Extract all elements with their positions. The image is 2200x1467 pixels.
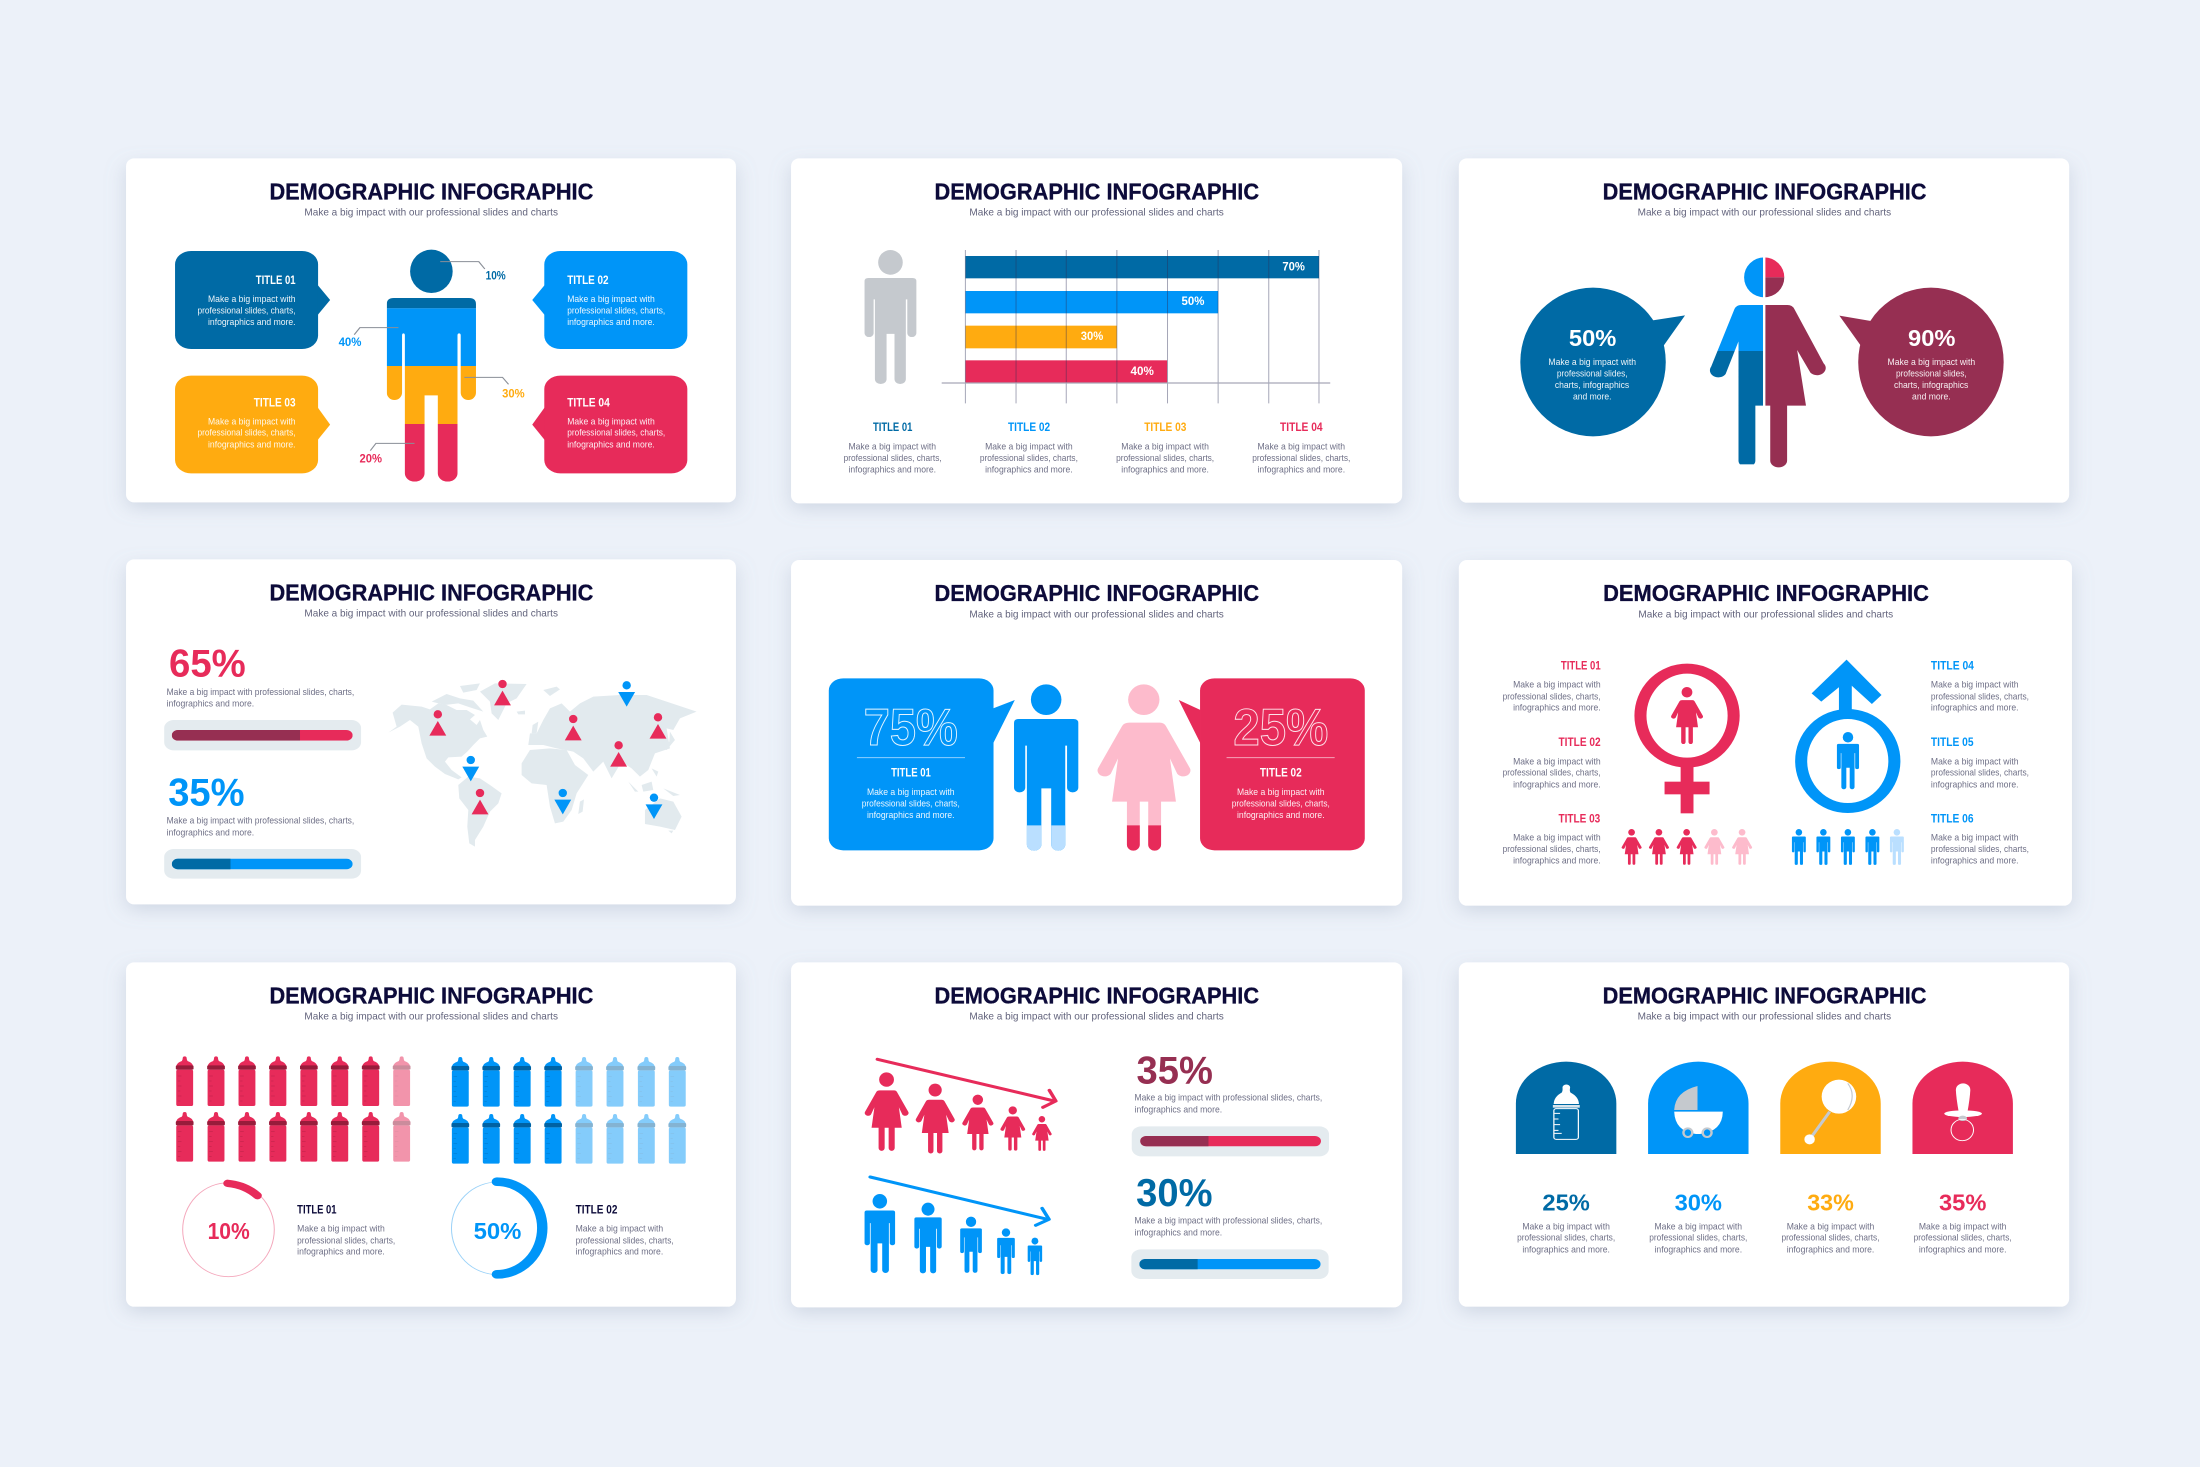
card xyxy=(126,158,736,502)
text block: title 02: professional slides, charts, xyxy=(576,1236,674,1246)
ring chart: 50% xyxy=(451,1182,544,1275)
panel: male and female percentages xyxy=(791,560,1402,906)
callout: title 02: Make a big impact with xyxy=(567,295,655,305)
ring chart: 10%: 10% xyxy=(208,1219,250,1244)
text block: title 06: Make a big impact with xyxy=(1931,833,2019,843)
callout: 75%: professional slides, charts, xyxy=(862,799,960,809)
text block: title 05 xyxy=(1931,735,2029,790)
statistic: 35%: 35% xyxy=(1939,1190,1986,1216)
callout: title 04 xyxy=(532,376,687,473)
text block: title 03: infographics and more. xyxy=(1121,465,1209,475)
statistic: 25% xyxy=(1517,1190,1615,1255)
text block: title 02: infographics and more. xyxy=(985,465,1073,475)
text block: title 03: infographics and more. xyxy=(1513,856,1601,866)
statistic: 25%: Make a big impact with xyxy=(1522,1222,1610,1232)
subheading: Make a big impact with our professional slides and charts xyxy=(304,1011,558,1022)
text block: title 02: TITLE 02 xyxy=(1008,420,1050,434)
text block: title 02: Make a big impact with xyxy=(576,1224,663,1234)
statistic: 25%: 25% xyxy=(1542,1190,1590,1216)
panel: baby bottle pictograms xyxy=(126,962,736,1307)
statistic: 35%: Make a big impact with professional slides, charts, xyxy=(167,816,354,826)
card xyxy=(791,962,1402,1307)
callout: title 04: professional slides, charts, xyxy=(567,428,665,438)
text block: title 01: infographics and more. xyxy=(848,465,936,475)
arch icon: baby rattle xyxy=(1780,1062,1881,1154)
text block: title 04: infographics and more. xyxy=(1258,465,1345,475)
text block: title 02: TITLE 02 xyxy=(576,1203,617,1216)
speech bubble: 50% xyxy=(1520,288,1685,436)
statistic: 35% xyxy=(1914,1190,2012,1255)
card xyxy=(1459,158,2069,503)
text block: title 01: TITLE 01 xyxy=(873,420,912,434)
text block: title 02: TITLE 02 xyxy=(1558,735,1601,749)
callout: title 03: infographics and more. xyxy=(208,440,296,450)
callout: 25% xyxy=(1179,678,1365,850)
progress bar: 30% xyxy=(1131,1249,1329,1279)
callout: 25%: TITLE 02 xyxy=(1260,766,1302,779)
text block: title 01 xyxy=(844,420,942,475)
heading: DEMOGRAPHIC INFOGRAPHIC xyxy=(269,580,593,606)
subheading: Make a big impact with our professional slides and charts xyxy=(969,208,1224,218)
text block: title 03: TITLE 03 xyxy=(1558,812,1600,825)
ring chart: 50%: 50% xyxy=(474,1219,521,1244)
speech bubble: 90% xyxy=(1839,288,2004,436)
statistic: 25%: infographics and more. xyxy=(1522,1245,1610,1255)
speech bubble: 50%: charts, infographics xyxy=(1555,381,1629,391)
callout: 25%: Make a big impact with xyxy=(1237,788,1325,798)
callout: title 02: TITLE 02 xyxy=(567,273,609,287)
speech bubble: 90%: charts, infographics xyxy=(1894,381,1968,391)
text block: title 02: infographics and more. xyxy=(1513,780,1601,790)
text block: title 01: infographics and more. xyxy=(1513,703,1601,713)
text block: title 06: TITLE 06 xyxy=(1931,812,1974,825)
callout: title 02: infographics and more. xyxy=(567,318,655,328)
text block: title 04: Make a big impact with xyxy=(1931,680,2019,690)
bar chart: 70% xyxy=(1282,259,1305,273)
speech bubble: 50%: Make a big impact with xyxy=(1548,358,1636,368)
panel: world map statistics xyxy=(126,559,736,904)
statistic: 35%: professional slides, charts, xyxy=(1914,1233,2012,1243)
text block: title 03: professional slides, charts, xyxy=(1116,454,1214,464)
panel: horizontal bar chart xyxy=(791,158,1402,503)
statistic: 30%: 30% xyxy=(1675,1190,1722,1216)
callout: title 03 xyxy=(175,376,330,473)
text block: title 01: Make a big impact with xyxy=(297,1224,385,1234)
icon: grey person xyxy=(865,250,916,384)
world map xyxy=(388,683,697,847)
callout: title 03: Make a big impact with xyxy=(208,417,296,427)
text block: title 03: TITLE 03 xyxy=(1144,420,1186,434)
statistic: 35%: infographics and more. xyxy=(1919,1245,2006,1255)
bar chart: 30% xyxy=(1081,329,1104,343)
statistic: 30% xyxy=(1649,1190,1747,1255)
text block: title 03: professional slides, charts, xyxy=(1503,845,1601,855)
subheading: Make a big impact with our professional slides and charts xyxy=(304,608,558,619)
speech bubble: 90%: and more. xyxy=(1912,392,1951,402)
subheading: Make a big impact with our professional slides and charts xyxy=(969,1011,1224,1022)
statistic: 30%: infographics and more. xyxy=(1655,1245,1742,1255)
label: 10%: 10% xyxy=(486,269,506,282)
pictogram: red bottles xyxy=(176,1056,410,1162)
statistic: 25%: professional slides, charts, xyxy=(1517,1233,1615,1243)
arch icon: baby bottle xyxy=(1516,1062,1616,1154)
statistic: 65% xyxy=(167,642,354,709)
pictogram: blue bottles xyxy=(451,1057,686,1164)
text block: title 01 xyxy=(1503,659,1601,713)
arch icon: pacifier xyxy=(1912,1062,2013,1154)
statistic: 30%: Make a big impact with xyxy=(1655,1222,1742,1232)
callout: title 03: professional slides, charts, xyxy=(198,428,296,438)
callout: 75%: 75% xyxy=(864,699,958,757)
label: 30% xyxy=(464,377,525,400)
text block: title 01: TITLE 01 xyxy=(1561,659,1601,672)
speech bubble: 90%: Make a big impact with xyxy=(1888,358,1975,368)
text block: title 04: TITLE 04 xyxy=(1931,659,1975,672)
statistic: 33%: infographics and more. xyxy=(1787,1245,1874,1255)
text block: title 02: professional slides, charts, xyxy=(1503,768,1601,778)
panel: gender symbols xyxy=(1459,560,2072,906)
subheading: Make a big impact with our professional slides and charts xyxy=(304,207,558,218)
statistic: 35%: infographics and more. xyxy=(167,828,254,838)
statistic: 65%: Make a big impact with professional slides, charts, xyxy=(167,688,354,698)
text block: title 01: Make a big impact with xyxy=(1513,680,1601,690)
heading: DEMOGRAPHIC INFOGRAPHIC xyxy=(1603,179,1927,205)
label: 20% xyxy=(359,443,415,465)
text block: title 03: Make a big impact with xyxy=(1121,442,1209,452)
icon: male symbol xyxy=(1801,660,1894,808)
text block: title 03: Make a big impact with xyxy=(1513,833,1601,843)
card xyxy=(1459,560,2072,906)
callout: title 04: Make a big impact with xyxy=(567,417,655,427)
speech bubble: 90%: 90% xyxy=(1908,326,1955,351)
bar chart: 40% xyxy=(1131,364,1154,378)
text block: title 05: professional slides, charts, xyxy=(1931,768,2029,778)
speech bubble: 90%: professional slides, xyxy=(1896,369,1967,379)
text block: title 03 xyxy=(1116,420,1214,475)
text block: title 02 xyxy=(1503,735,1601,790)
bar chart xyxy=(942,250,1330,403)
panel: body segments chart xyxy=(126,158,736,502)
statistic: 30%: professional slides, charts, xyxy=(1649,1233,1747,1243)
card xyxy=(126,962,736,1307)
callout: 25%: professional slides, charts, xyxy=(1232,799,1330,809)
heading: DEMOGRAPHIC INFOGRAPHIC xyxy=(1603,983,1927,1009)
card xyxy=(791,560,1402,906)
statistic: 30%: Make a big impact with professional slides, charts, xyxy=(1135,1216,1322,1226)
subheading: Make a big impact with our professional slides and charts xyxy=(1638,1011,1892,1022)
arrow: red trend xyxy=(877,1059,1056,1107)
subheading: Make a big impact with our professional slides and charts xyxy=(969,609,1224,620)
speech bubble: 50%: and more. xyxy=(1573,392,1612,402)
text block: title 04: TITLE 04 xyxy=(1280,420,1323,434)
progress bar: 35% xyxy=(1132,1126,1329,1156)
text block: title 02: professional slides, charts, xyxy=(980,454,1078,464)
statistic: 65%: 65% xyxy=(169,642,246,685)
split person figure xyxy=(1707,257,1826,467)
callout: title 01 xyxy=(175,251,330,349)
text block: title 03 xyxy=(1503,812,1601,866)
text block: title 01: infographics and more. xyxy=(297,1247,385,1257)
heading: DEMOGRAPHIC INFOGRAPHIC xyxy=(934,983,1259,1009)
label: 30%: 30% xyxy=(502,386,525,400)
subheading: Make a big impact with our professional slides and charts xyxy=(1638,609,1894,620)
heading: DEMOGRAPHIC INFOGRAPHIC xyxy=(934,581,1259,606)
person figure in colour bands xyxy=(386,250,476,482)
statistic: 30% xyxy=(1135,1172,1322,1238)
heading: DEMOGRAPHIC INFOGRAPHIC xyxy=(269,179,593,205)
text block: title 06: professional slides, charts, xyxy=(1931,845,2029,855)
statistic: 35% xyxy=(167,771,354,838)
text block: title 01: Make a big impact with xyxy=(848,442,936,452)
text block: title 02: infographics and more. xyxy=(576,1247,663,1257)
label: 20%: 20% xyxy=(359,451,382,465)
text block: title 04 xyxy=(1931,659,2029,713)
callout: 25%: 25% xyxy=(1233,699,1328,757)
heading: DEMOGRAPHIC INFOGRAPHIC xyxy=(934,179,1259,205)
female location markers xyxy=(429,680,666,814)
text block: title 05: Make a big impact with xyxy=(1931,757,2019,767)
text block: title 01: TITLE 01 xyxy=(297,1203,337,1216)
card xyxy=(126,559,736,904)
callout: title 03: TITLE 03 xyxy=(254,395,296,409)
text block: title 01 xyxy=(297,1203,395,1257)
speech bubble: 50%: professional slides, xyxy=(1557,369,1628,379)
statistic: 35%: Make a big impact with professional slides, charts, xyxy=(1135,1093,1322,1103)
statistic: 33% xyxy=(1781,1190,1880,1255)
ring chart: 10% xyxy=(183,1183,274,1277)
icon: pink woman xyxy=(1098,684,1190,851)
callout: title 04: TITLE 04 xyxy=(567,395,610,409)
statistic: 33%: Make a big impact with xyxy=(1787,1222,1874,1232)
card xyxy=(791,158,1402,503)
callout: title 01: professional slides, charts, xyxy=(198,306,296,316)
callout: title 02: professional slides, charts, xyxy=(567,306,665,316)
callout: title 04: infographics and more. xyxy=(567,440,655,450)
callout: title 01: TITLE 01 xyxy=(256,273,296,287)
text block: title 05: TITLE 05 xyxy=(1931,735,1974,749)
text block: title 02: Make a big impact with xyxy=(985,442,1073,452)
label: 40%: 40% xyxy=(339,335,362,349)
text block: title 06: infographics and more. xyxy=(1931,856,2019,866)
statistic: 35%: Make a big impact with xyxy=(1919,1222,2006,1232)
text block: title 06 xyxy=(1931,812,2029,866)
callout: 75% xyxy=(829,678,1015,850)
text block: title 04: Make a big impact with xyxy=(1258,442,1345,452)
text block: title 04: professional slides, charts, xyxy=(1252,454,1350,464)
callout: 75%: Make a big impact with xyxy=(867,788,955,798)
text block: title 01: professional slides, charts, xyxy=(297,1236,395,1246)
text block: title 02: Make a big impact with xyxy=(1513,757,1601,767)
statistic: 35% xyxy=(1135,1049,1322,1115)
text block: title 01: professional slides, charts, xyxy=(844,454,942,464)
progress bar: 35% xyxy=(164,849,361,879)
male location markers xyxy=(462,681,662,819)
pictogram: men row xyxy=(1792,829,1904,865)
progress bar: 65% xyxy=(164,720,361,750)
pictogram: men declining xyxy=(865,1194,1042,1275)
text block: title 04: professional slides, charts, xyxy=(1931,692,2029,702)
callout: 25%: infographics and more. xyxy=(1237,811,1325,821)
callout: title 02 xyxy=(532,251,687,349)
bar chart: 50% xyxy=(1182,294,1205,308)
callout: 75%: infographics and more. xyxy=(867,811,955,821)
heading: DEMOGRAPHIC INFOGRAPHIC xyxy=(269,983,593,1009)
statistic: 33%: professional slides, charts, xyxy=(1781,1233,1880,1243)
callout: title 01: Make a big impact with xyxy=(208,295,296,305)
statistic: 30%: 30% xyxy=(1136,1172,1213,1215)
callout: title 01: infographics and more. xyxy=(208,318,296,328)
icon: female symbol xyxy=(1640,669,1734,813)
panel: gender split figure xyxy=(1459,158,2069,503)
pictogram: women declining xyxy=(865,1072,1052,1154)
arch icon: baby stroller xyxy=(1648,1062,1749,1154)
text block: title 04: infographics and more. xyxy=(1931,703,2019,713)
statistic: 35%: 35% xyxy=(168,771,245,815)
text block: title 02 xyxy=(980,420,1078,475)
text block: title 01: professional slides, charts, xyxy=(1503,692,1601,702)
panel: baby icons xyxy=(1459,962,2069,1307)
pictogram: women row xyxy=(1622,829,1752,865)
card xyxy=(1459,962,2069,1307)
callout: 75%: TITLE 01 xyxy=(891,766,931,779)
speech bubble: 50%: 50% xyxy=(1569,326,1616,351)
label: 10% xyxy=(440,262,506,282)
arrow: blue trend xyxy=(870,1177,1049,1225)
statistic: 33%: 33% xyxy=(1807,1190,1854,1216)
subheading: Make a big impact with our professional slides and charts xyxy=(1638,207,1892,218)
statistic: 65%: infographics and more. xyxy=(167,699,254,709)
panel: declining population xyxy=(791,962,1402,1307)
text block: title 04 xyxy=(1252,420,1350,475)
statistic: 35%: infographics and more. xyxy=(1135,1105,1222,1115)
text block: title 05: infographics and more. xyxy=(1931,780,2019,790)
text block: title 02 xyxy=(576,1203,674,1257)
statistic: 30%: infographics and more. xyxy=(1135,1228,1222,1238)
icon: blue man xyxy=(1014,684,1078,851)
heading: DEMOGRAPHIC INFOGRAPHIC xyxy=(1603,581,1929,606)
label: 40% xyxy=(339,328,398,349)
statistic: 35%: 35% xyxy=(1137,1049,1213,1092)
